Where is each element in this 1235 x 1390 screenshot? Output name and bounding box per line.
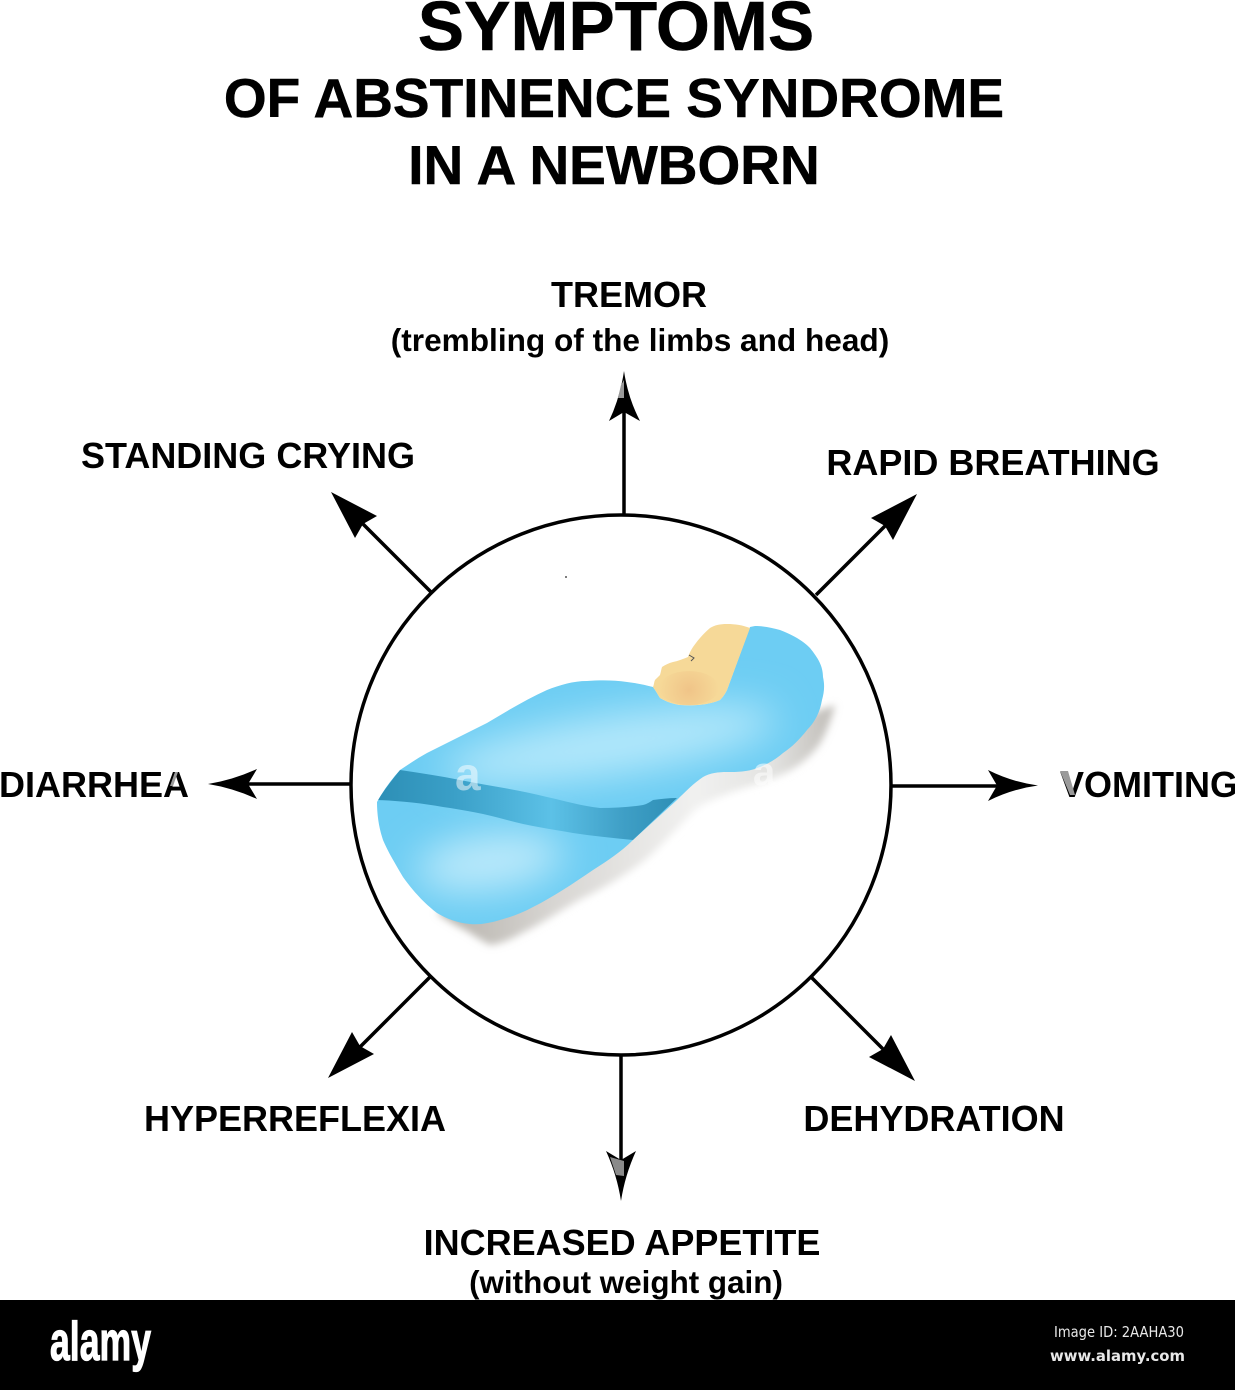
label: dehydration: DEHYDRATION: [803, 1098, 1065, 1139]
blanket: [370, 620, 830, 930]
label: rapid breathing: RAPID BREATHING: [826, 442, 1160, 483]
arrow: tremor: [609, 371, 640, 514]
arrow: diarrhea: [208, 769, 351, 799]
blanket shadow: [437, 705, 835, 945]
illustration: swaddled newborn: [370, 620, 835, 945]
watermark letter on shadow: a: [753, 750, 776, 794]
watermark logo: alamy: [50, 1310, 151, 1372]
label: diarrhea: DIARRHEA: [0, 764, 189, 805]
watermark letter on blanket: a: [455, 748, 481, 800]
arrow: vomiting: [891, 770, 1038, 801]
source url: www.alamy.com: [1050, 1347, 1185, 1365]
label: increased appetite: (without weight gain): [469, 1265, 783, 1300]
baby face: [653, 624, 750, 705]
arrow: rapid breathing: [816, 494, 917, 595]
arrow: dehydration: [811, 977, 915, 1081]
title: OF ABSTINENCE SYNDROME: [224, 67, 1004, 129]
label: tremor: TREMOR: [551, 274, 707, 315]
arrow: increased appetite: [606, 1056, 636, 1201]
central circle: [351, 515, 891, 1055]
label: vomiting: VOMITING: [1060, 764, 1235, 805]
arrow: hyperreflexia: [328, 977, 430, 1078]
title: IN A NEWBORN: [408, 134, 820, 196]
arrow: standing crying: [331, 492, 431, 592]
footer bar: [0, 1300, 1235, 1390]
image id: Image ID: 2AAHA30: [1054, 1323, 1184, 1341]
label: tremor: [391, 274, 889, 358]
speck: [565, 576, 567, 578]
baby eye: [689, 655, 694, 661]
title: [224, 0, 1004, 196]
label: increased appetite: INCREASED APPETITE: [424, 1222, 820, 1263]
label: hyperreflexia: HYPERREFLEXIA: [144, 1098, 446, 1139]
baby cheek: [659, 671, 719, 705]
blanket fold band: [378, 770, 677, 840]
label: increased appetite: [424, 1222, 820, 1300]
label: tremor: (trembling of the limbs and head): [391, 322, 889, 358]
label: standing crying: STANDING CRYING: [81, 435, 415, 476]
